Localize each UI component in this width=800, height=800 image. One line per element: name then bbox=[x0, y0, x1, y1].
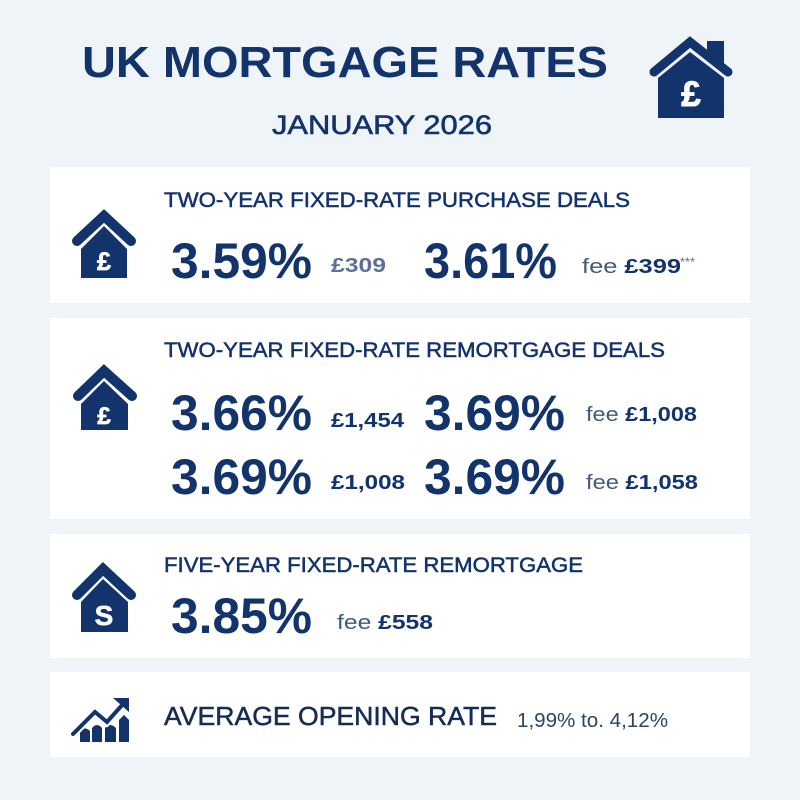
rate 3.85%: 3.85% bbox=[171, 588, 312, 644]
title: UK MORTGAGE RATES bbox=[82, 38, 608, 87]
icon: house with pound sign, remortgage bbox=[78, 371, 132, 430]
icon: house with S sign: S bbox=[95, 600, 113, 631]
panel: five-year remortgage bbox=[50, 534, 750, 658]
icon: house with S sign bbox=[77, 569, 131, 632]
heading: two-year purchase: TWO-YEAR FIXED-RATE PURCHASE DEALS bbox=[164, 189, 630, 212]
icon: house with pound sign, purchase bbox=[77, 216, 131, 278]
footnote stars: *** bbox=[680, 255, 695, 269]
panel: two-year purchase deals bbox=[50, 167, 750, 303]
fee £558: fee £558 bbox=[337, 612, 433, 634]
rate 3.69% second row: 3.69% bbox=[171, 449, 312, 505]
rate 3.59%: 3.59% bbox=[171, 233, 312, 289]
fee £1,454: £1,454 bbox=[331, 410, 405, 432]
fee £399: fee £399 bbox=[582, 256, 681, 278]
rate 3.69% second row right: 3.69% bbox=[424, 449, 565, 505]
heading: average opening rate: AVERAGE OPENING RATE bbox=[164, 701, 497, 731]
heading: five-year remortgage: FIVE-YEAR FIXED-RATE REMORTGAGE bbox=[164, 554, 583, 577]
icon: rising bar chart with arrow bbox=[73, 698, 129, 742]
fee £1,008: fee £1,008 bbox=[586, 404, 697, 426]
heading: two-year remortgage: TWO-YEAR FIXED-RATE REMORTGAGE DEALS bbox=[164, 339, 665, 362]
rate 3.61%: 3.61% bbox=[424, 233, 557, 289]
icon: house with pound sign, remortgage: £ bbox=[97, 403, 111, 430]
rate 3.69%: 3.69% bbox=[424, 385, 565, 441]
range of rates: 1,99% to. 4,12% bbox=[517, 710, 668, 732]
rate 3.66%: 3.66% bbox=[171, 385, 312, 441]
fee £309: £309 bbox=[331, 255, 386, 277]
icon: house with pound sign: £ bbox=[681, 75, 701, 114]
subtitle: date: JANUARY 2026 bbox=[272, 110, 492, 140]
icon: house with pound sign bbox=[654, 41, 728, 118]
fee £1,058: fee £1,058 bbox=[586, 472, 698, 494]
icon: house with pound sign, purchase: £ bbox=[97, 248, 111, 276]
fee £1,008 second row: £1,008 bbox=[331, 472, 405, 494]
panel: two-year remortgage deals bbox=[50, 318, 750, 519]
panel: average opening rate bbox=[50, 672, 750, 757]
